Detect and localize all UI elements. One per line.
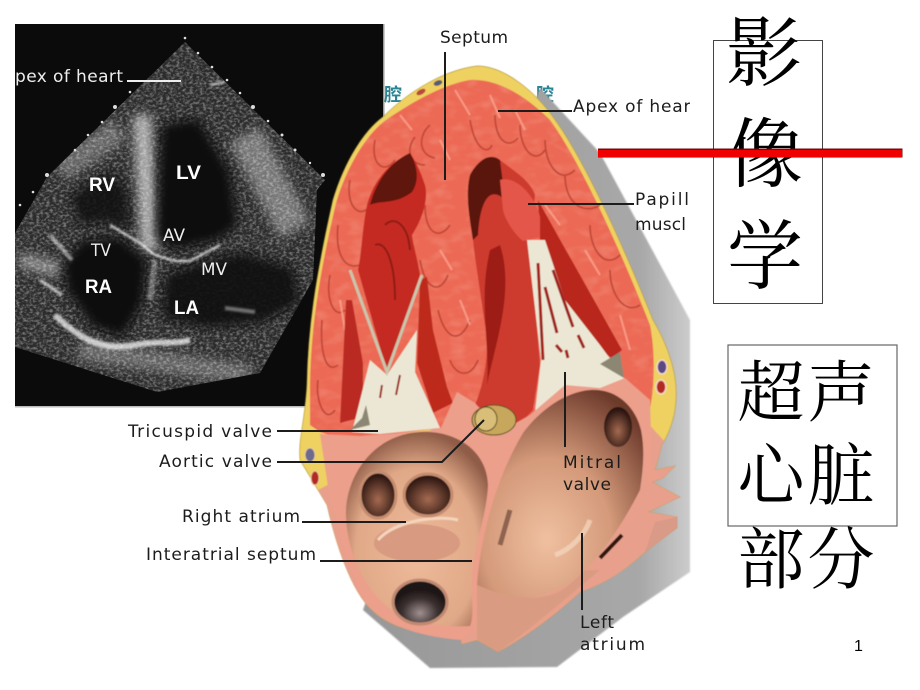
anatomical heart illustration xyxy=(300,66,690,668)
heart label: Aortic valve xyxy=(159,420,484,472)
teal text fragments behind heart: 腔 xyxy=(536,84,554,105)
aortic valve xyxy=(472,405,516,435)
ultrasound labels: pex of heart xyxy=(15,67,123,87)
heart label: Right atrium: Right atrium xyxy=(182,507,300,527)
pulmonary vessels in fat xyxy=(305,360,667,485)
subtitle: 超声心脏部分: 分 xyxy=(808,524,874,598)
heart label: Mitral valve: valve xyxy=(563,475,611,495)
teal text fragments behind heart xyxy=(384,84,554,105)
subtitle: 超声心脏部分: 心 xyxy=(738,440,808,514)
ultrasound labels: MV xyxy=(201,260,227,280)
heart label: Apex of heart: Apex of heart xyxy=(573,97,698,117)
subtitle: 超声心脏部分: 声 xyxy=(808,357,874,431)
vertical title: 影像学: 像 xyxy=(727,114,803,198)
outer fat layer xyxy=(300,66,680,652)
right ventricle cavity xyxy=(340,153,453,423)
right atrium xyxy=(346,432,488,626)
ultrasound labels: TV xyxy=(90,241,111,261)
heart drop shadow xyxy=(363,88,690,668)
subtitle: 超声心脏部分: 脏 xyxy=(808,440,874,514)
leader line: papillary xyxy=(528,203,634,205)
myocardium wall xyxy=(310,80,654,440)
ultrasound labels: LV xyxy=(176,163,201,184)
ultrasound labels: RV xyxy=(89,175,115,196)
red horizontal rule xyxy=(598,148,902,158)
vertical title: 影像学: 学 xyxy=(727,216,803,300)
ultrasound labels xyxy=(15,67,227,319)
vertical title: 影像学 xyxy=(726,13,803,300)
heart label: Tricuspid valve: Tricuspid valve xyxy=(127,422,272,442)
heart label: Mitral valve xyxy=(563,372,621,495)
title box outline: 影像学 xyxy=(714,40,822,304)
heart label: Interatrial septum: Interatrial septum xyxy=(146,545,316,565)
leader line: apex xyxy=(498,110,572,112)
heart label: Papillary muscle: muscl xyxy=(635,215,686,235)
muscle fibre lobes xyxy=(317,90,640,415)
ultrasound labels: AV xyxy=(163,226,185,246)
muscle fibre texture xyxy=(316,80,654,424)
heart label: Left atrium xyxy=(580,533,645,655)
left ventricle cavity xyxy=(468,157,622,427)
heart label: Papillary muscle: Papill xyxy=(635,190,689,210)
page number: 1 xyxy=(854,638,863,655)
ultrasound labels: RA xyxy=(85,277,112,298)
pink atrial wall tissue xyxy=(320,378,660,640)
heart label: Left atrium: atrium xyxy=(580,635,645,655)
subtitle: 超声心脏部分 xyxy=(738,357,874,598)
left atrium xyxy=(477,390,677,652)
subtitle box outline xyxy=(728,345,897,526)
heart label: Aortic valve: Aortic valve xyxy=(159,452,272,472)
subtitle: 超声心脏部分: 部 xyxy=(738,524,804,598)
vertical title: 影像学: 影 xyxy=(726,13,802,97)
panel: echocardiogram ultrasound image xyxy=(15,24,384,408)
heart label: Septum: Septum xyxy=(440,28,508,48)
subtitle: 超声心脏部分: 超 xyxy=(738,357,804,431)
chordae tendineae and valve leaflets xyxy=(350,240,625,434)
heart label: Left atrium: Left xyxy=(580,613,614,633)
teal text fragments behind heart: 腔 xyxy=(384,84,402,105)
papillary muscle xyxy=(500,179,540,241)
heart label: Papillary muscle xyxy=(636,192,688,230)
heart label: Mitral valve: Mitral xyxy=(563,453,621,473)
ultrasound labels: LA xyxy=(174,298,199,319)
coronary vessels in apex fat xyxy=(415,79,443,97)
